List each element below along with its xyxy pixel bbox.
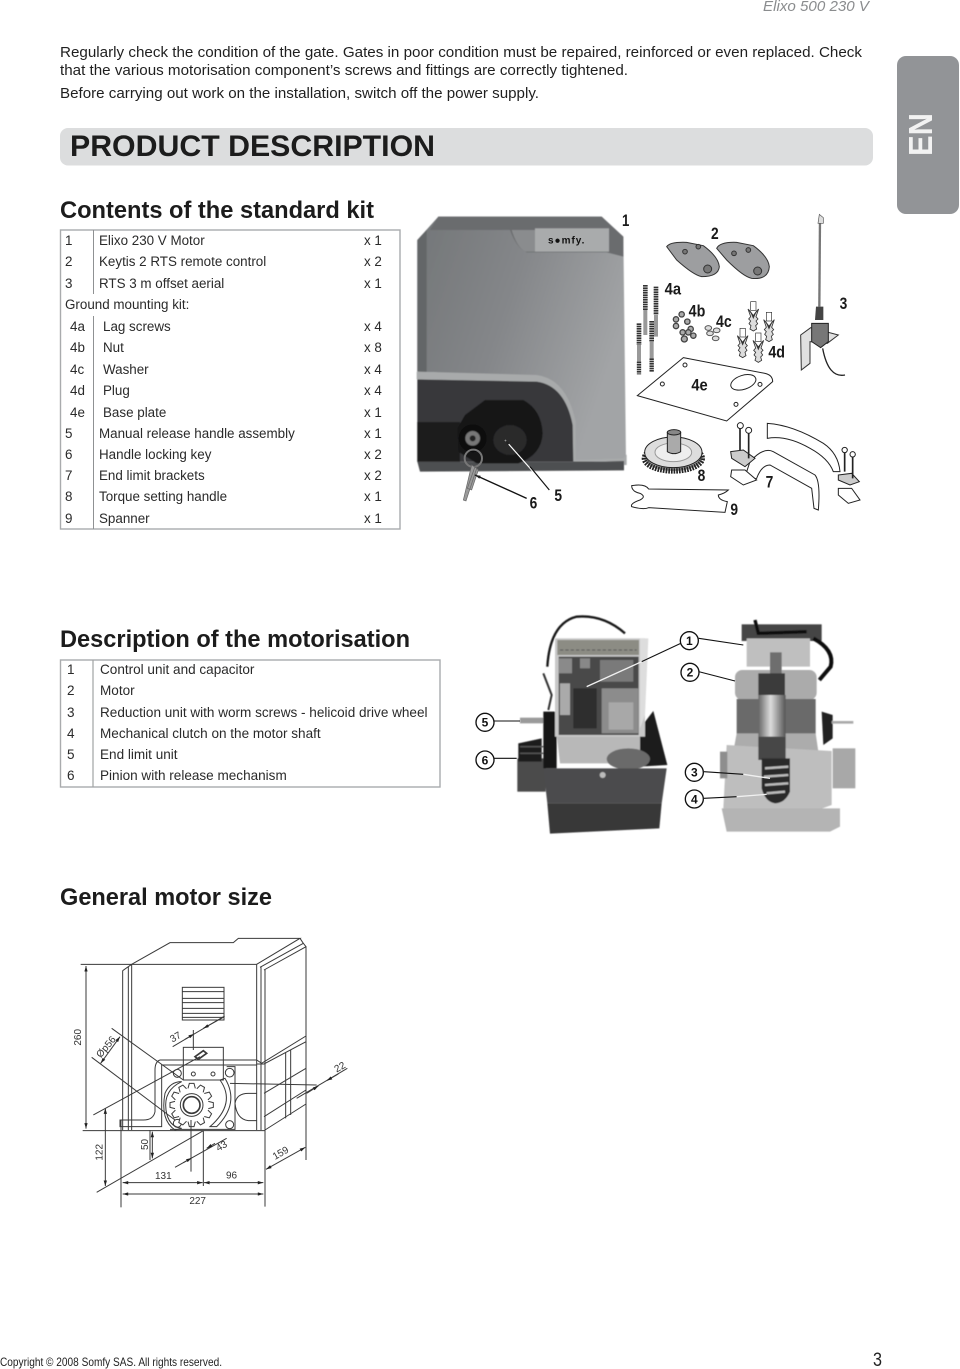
table: kit contents: 3 xyxy=(65,276,72,291)
table: motorisation components: 3 xyxy=(67,705,75,720)
callout numbers: 6 xyxy=(482,753,489,767)
table: kit contents xyxy=(60,230,400,529)
dimension values: 50 xyxy=(140,1138,151,1150)
kit illustration: motor and accessories xyxy=(417,211,860,519)
callout numbers: 4 xyxy=(691,792,698,806)
table: kit contents: x 1 xyxy=(364,405,382,420)
dimension values: 122 xyxy=(95,1144,106,1161)
table: kit contents: x 1 xyxy=(364,489,382,504)
table: kit contents: Plug xyxy=(103,383,130,398)
table: kit contents: 7 xyxy=(65,468,72,483)
heading: general motor size: General motor size xyxy=(60,885,272,911)
table: kit contents: Elixo 230 V Motor xyxy=(99,233,205,248)
table: kit contents: 5 xyxy=(65,426,72,441)
part 8: torque setting handle xyxy=(644,430,702,471)
section banner: product description: PRODUCT DESCRIPTION xyxy=(70,130,435,163)
table: kit contents: 4c xyxy=(70,362,84,377)
part 2: remote controls xyxy=(667,242,769,279)
callout numbers: 1 xyxy=(686,634,693,648)
section banner: product description xyxy=(60,128,873,166)
table: kit contents: Manual release handle assembly xyxy=(99,426,295,441)
table: kit contents: x 1 xyxy=(364,426,382,441)
table: kit contents: x 4 xyxy=(364,362,382,377)
dimension values: 131 xyxy=(155,1171,172,1182)
limit bracket and gear xyxy=(164,1047,235,1130)
callout numbers: 3 xyxy=(691,766,698,780)
table: kit contents: x 4 xyxy=(364,383,382,398)
intro text block: Regularly check the condition of the gate. Gates in poor condition must be repaired, reinforced or even replaced. Check xyxy=(60,44,863,61)
table: kit contents: 1 xyxy=(65,233,72,248)
table: kit contents: Washer xyxy=(103,362,149,377)
table: kit contents: 4b xyxy=(70,340,85,355)
table: motorisation components: 1 xyxy=(67,662,75,677)
table: motorisation components: 5 xyxy=(67,747,75,762)
dimension values: Øp56 xyxy=(95,1034,119,1060)
table: motorisation components: End limit unit xyxy=(100,747,178,762)
dimension values: 96 xyxy=(226,1170,238,1181)
table: kit contents: 4e xyxy=(70,405,85,420)
table: kit contents: x 2 xyxy=(364,254,382,269)
part labels: 4b xyxy=(689,301,705,320)
table: kit contents: 2 xyxy=(65,254,72,269)
dimension values xyxy=(73,1029,348,1207)
table: kit contents: Spanner xyxy=(99,511,150,526)
part labels: 9 xyxy=(730,500,738,519)
table: kit contents: Keytis 2 RTS remote control xyxy=(99,254,266,269)
part labels: 5 xyxy=(554,486,562,505)
dimension values: 159 xyxy=(271,1145,291,1163)
table: kit contents: x 1 xyxy=(364,233,382,248)
part labels: 4e xyxy=(691,375,708,394)
table: motorisation components: 6 xyxy=(67,768,75,783)
callout numbers xyxy=(476,632,703,808)
part labels: 3 xyxy=(840,294,847,313)
part labels xyxy=(530,211,847,519)
part 4d: plugs xyxy=(737,302,774,362)
part 4b: nuts xyxy=(673,312,696,342)
table: motorisation components: Reduction unit with worm screws - helicoid drive wheel xyxy=(100,705,428,720)
photo: open motor with control unit xyxy=(517,616,667,834)
dimension values: 37 xyxy=(168,1030,184,1045)
dimension values: 43 xyxy=(214,1139,230,1154)
table: motorisation components: Control unit and capacitor xyxy=(100,662,255,677)
table: kit contents: 6 xyxy=(65,447,72,462)
part 4c: washers xyxy=(705,326,720,341)
intro text block: Before carrying out work on the installation, switch off the power supply. xyxy=(60,85,539,102)
part labels: 4d xyxy=(768,343,785,362)
part labels: 4a xyxy=(665,279,682,298)
table: motorisation components: 4 xyxy=(67,726,75,741)
dimension lines xyxy=(86,966,347,1207)
dimension drawing xyxy=(73,938,348,1207)
dimension values: 22 xyxy=(333,1060,348,1075)
footer: copyright: Copyright © 2008 Somfy SAS. All rights reserved. xyxy=(0,1355,222,1369)
intro text block: that the various motorisation component’s screws and fittings are correctly tightened. xyxy=(60,62,628,79)
table: kit contents: 4a xyxy=(70,319,85,334)
arrow: 6 to key xyxy=(475,475,527,498)
table: kit contents: Handle locking key xyxy=(99,447,212,462)
vents xyxy=(182,987,224,1020)
dimension values: 260 xyxy=(73,1029,84,1046)
heading: description of the motorisation: Description of the motorisation xyxy=(60,627,410,653)
table: kit contents: x 1 xyxy=(364,276,382,291)
motorisation photos with callouts xyxy=(476,616,855,834)
table: kit contents: x 2 xyxy=(364,447,382,462)
language tab EN: EN xyxy=(902,113,939,156)
part 3: offset aerial xyxy=(801,214,845,375)
photo: motor cutaway xyxy=(720,620,855,832)
somfy logo: s●mfy. xyxy=(548,235,585,246)
photo: motor housing xyxy=(417,217,627,501)
part labels: 7 xyxy=(766,473,773,492)
intro text block xyxy=(60,44,863,102)
dimension values: 227 xyxy=(189,1196,206,1207)
table: motorisation components: Mechanical clutch on the motor shaft xyxy=(100,726,321,741)
table: kit contents: 9 xyxy=(65,511,72,526)
part labels: 4c xyxy=(716,312,732,331)
table: kit contents: Ground mounting kit: xyxy=(65,297,189,312)
arrow: 5 to release handle xyxy=(505,440,549,490)
table: motorisation components: 2 xyxy=(67,683,75,698)
table: kit contents: End limit brackets xyxy=(99,468,205,483)
part labels: 1 xyxy=(622,211,629,230)
table: kit contents: RTS 3 m offset aerial xyxy=(99,276,224,291)
part labels: 2 xyxy=(711,224,719,243)
table: kit contents: x 8 xyxy=(364,340,382,355)
table: kit contents: Base plate xyxy=(103,405,166,420)
motor outline xyxy=(81,938,306,1207)
table: kit contents: x 2 xyxy=(364,468,382,483)
callout numbers: 2 xyxy=(687,666,694,680)
table: kit contents: x 1 xyxy=(364,511,382,526)
callout numbers: 5 xyxy=(482,716,489,730)
table: kit contents: Nut xyxy=(103,340,124,355)
part 4a: lag screws xyxy=(639,285,656,374)
table: motorisation components xyxy=(60,660,440,787)
part 7: end limit brackets xyxy=(731,423,860,510)
heading: contents of the standard kit: Contents of the standard kit xyxy=(60,198,374,224)
table: motorisation components: Pinion with release mechanism xyxy=(100,768,287,783)
table: motorisation components: Motor xyxy=(100,683,135,698)
table: kit contents: 4d xyxy=(70,383,85,398)
language tab EN xyxy=(897,56,959,214)
callout leader lines xyxy=(494,638,770,798)
part labels: 6 xyxy=(530,493,537,512)
table: kit contents: 8 xyxy=(65,489,72,504)
table: kit contents: Lag screws xyxy=(103,319,171,334)
part 9: spanner xyxy=(631,485,728,512)
table: kit contents: Torque setting handle xyxy=(99,489,227,504)
part 4e: base plate xyxy=(637,358,773,421)
table: kit contents: x 4 xyxy=(364,319,382,334)
part labels: 8 xyxy=(698,466,705,485)
